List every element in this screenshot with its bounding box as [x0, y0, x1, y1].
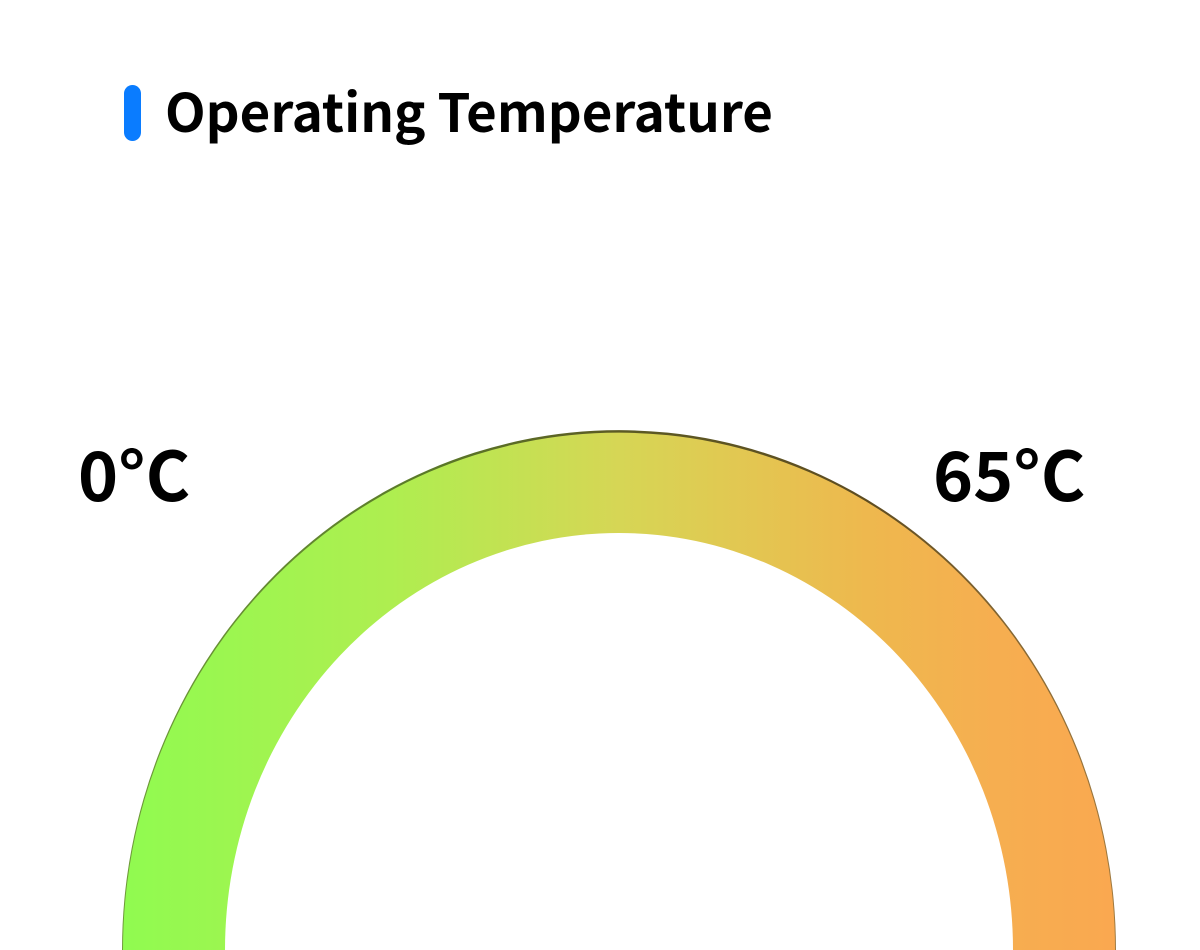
heading accent bar — [124, 85, 141, 141]
arc dark outer edge — [122, 430, 1116, 950]
title: Operating Temperature — [165, 72, 773, 148]
label: maximum temperature: 65°C — [933, 422, 1085, 521]
arc inner cut-out — [225, 533, 1013, 950]
label: minimum temperature: 0°C — [78, 422, 190, 521]
arc colour band — [123, 433, 1115, 950]
